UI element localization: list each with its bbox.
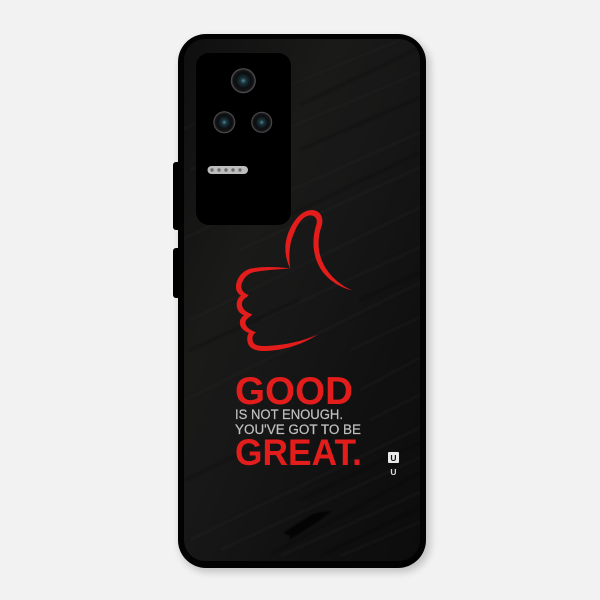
brand logo: U <box>390 467 397 477</box>
thumb outline <box>285 210 352 290</box>
icon: red thumbs up outline <box>236 210 352 351</box>
brand logo: U <box>390 453 397 463</box>
heading: GOOD: GOOD <box>235 370 353 413</box>
hand outline <box>236 267 318 351</box>
lens: left <box>213 111 235 133</box>
camera module <box>196 53 291 225</box>
line: you've got to be: YOU'VE GOT TO BE <box>235 422 361 437</box>
phone case body <box>178 34 426 568</box>
heading: GREAT: GREAT. <box>235 431 362 473</box>
case shadow <box>180 38 430 572</box>
line: is not enough: IS NOT ENOUGH. <box>235 407 343 422</box>
decorative streak mark <box>284 512 330 538</box>
back panel with brushed texture <box>180 39 425 561</box>
brand logo <box>388 452 399 477</box>
flash strip <box>208 166 248 174</box>
slogan text <box>235 370 362 473</box>
lens: right <box>251 112 272 133</box>
side button: lower <box>173 248 181 298</box>
phone case product image <box>173 34 434 576</box>
side button: upper <box>173 162 181 230</box>
lens: top <box>231 68 256 93</box>
